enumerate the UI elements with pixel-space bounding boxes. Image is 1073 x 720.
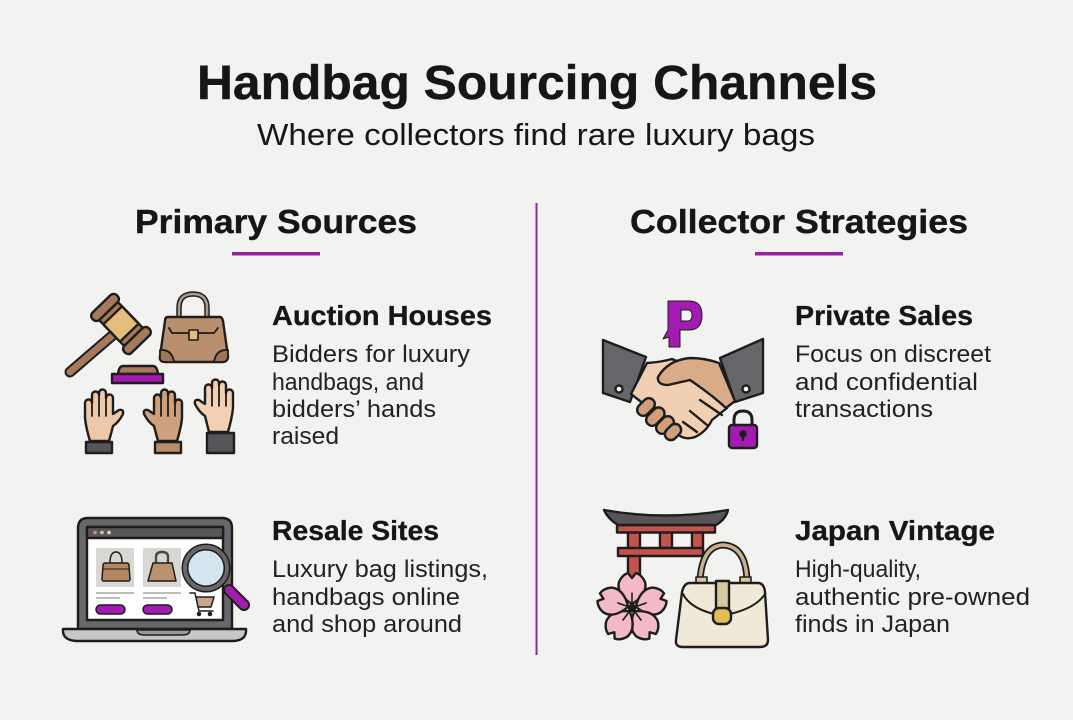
heading: Auction Houses: Auction Houses [272,300,492,331]
text: Japan Vintage description: authentic pre-owned [795,584,1030,611]
heading: Collector Strategies: Collector Strategies [630,203,968,240]
text: Auction Houses description: handbags, and [272,369,424,396]
text: Japan Vintage description [795,556,1030,638]
icon: laptop with listings [63,518,246,641]
icon: handshake with lock [603,301,763,448]
listing 2 [143,548,181,614]
text: Private Sales description: Focus on discreet [795,341,991,368]
icon: raised hand right [195,380,234,453]
title: Handbag Sourcing Channels [197,57,877,110]
icon: handbag [160,294,228,362]
icon: gavel and bidders [70,292,234,453]
text: Japan Vintage description: finds in Japan [795,611,950,638]
padlock [729,411,757,448]
handbag [676,545,768,647]
panel: Resale Sites [63,515,488,641]
panel: Auction Houses [70,292,492,453]
panel: Private Sales [603,300,991,448]
clasped hands [631,358,735,443]
cherry blossom [595,573,669,644]
purple P logo [663,301,702,347]
panel: Japan Vintage [595,510,1030,647]
text: Private Sales description: and confidential [795,369,978,396]
text: Resale Sites description: Luxury bag listings, [272,556,488,583]
heading: Collector Strategies [630,203,968,256]
shopping cart [190,593,214,616]
text: Resale Sites description: and shop around [272,611,462,638]
laptop [63,518,246,641]
text: Resale Sites description [272,556,488,638]
icon: raised hand left [85,390,123,453]
magnifying glass [185,547,244,605]
left cuff [603,340,646,402]
listing 1 [96,548,134,614]
icon: sound block [112,366,163,383]
icon: torii gate, blossom and bag [595,510,768,647]
heading: Primary Sources: Primary Sources [135,203,417,240]
text: Resale Sites description: handbags online [272,584,460,611]
text: Auction Houses description: Bidders for luxury [272,341,470,368]
heading: Primary Sources [135,203,417,256]
subtitle: Where collectors find rare luxury bags [257,117,815,152]
right cuff [720,339,763,402]
text: Private Sales description: transactions [795,396,933,423]
text: Auction Houses description: raised [272,423,339,450]
heading: Resale Sites: Resale Sites [272,515,439,546]
torii gate [604,510,728,577]
text: Japan Vintage description: High-quality, [795,556,921,583]
icon: raised hand middle [144,390,182,453]
heading: Japan Vintage: Japan Vintage [795,515,995,546]
icon: gavel [70,292,153,372]
text: Auction Houses description [272,341,470,450]
text: Private Sales description [795,341,991,423]
text: Auction Houses description: bidders’ hands [272,396,436,423]
heading: Private Sales: Private Sales [795,300,973,331]
